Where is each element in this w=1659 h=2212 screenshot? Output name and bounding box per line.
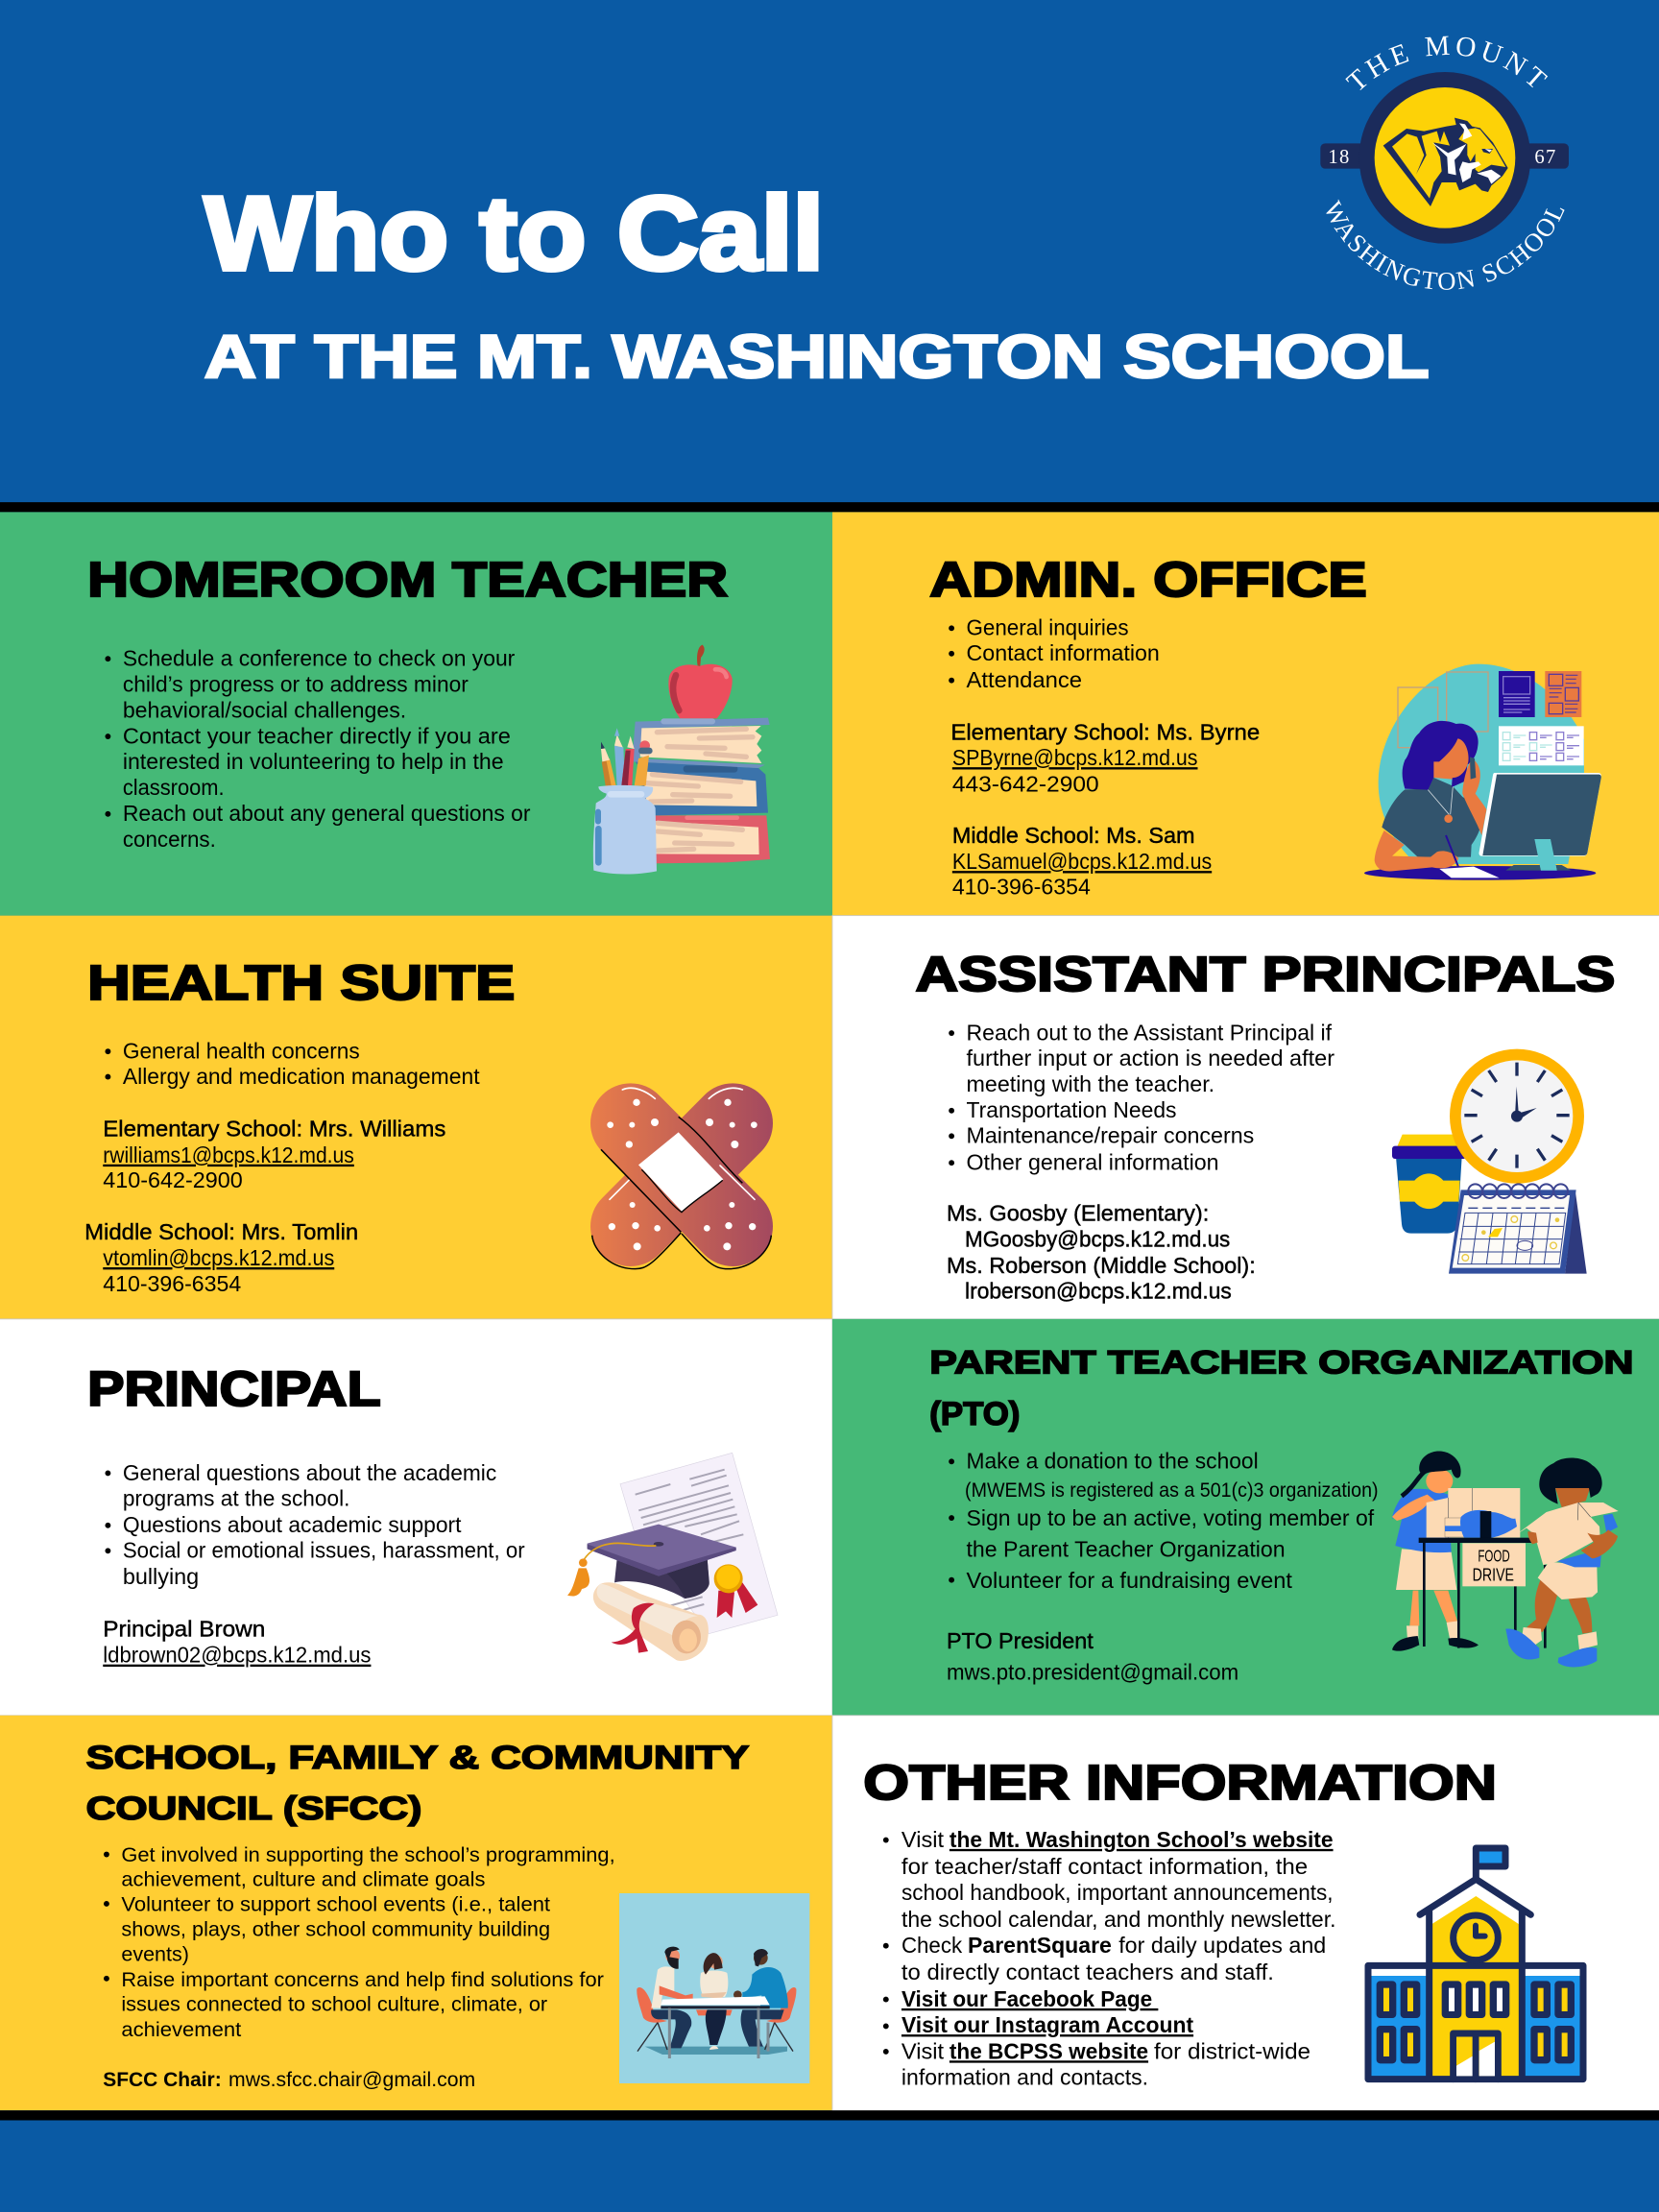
contact: pto: mws.pto.president@gmail.com bbox=[947, 1659, 1238, 1684]
header band bbox=[202, 36, 1569, 391]
list: homeroom: child’s progress or to address minor bbox=[123, 671, 469, 696]
contacts: admin: SPByrne@bcps.k12.md.us bbox=[952, 745, 1198, 770]
list: pto: Sign up to be an active, voting member of bbox=[967, 1505, 1375, 1530]
list: admin: General inquiries bbox=[967, 615, 1129, 640]
logo: The Mount Washington School: 67 bbox=[1534, 147, 1557, 168]
icon: school building bbox=[1368, 1848, 1583, 2080]
contacts: admin: 443-642-2900 bbox=[952, 771, 1099, 796]
list: other information: the school calendar, and monthly newsletter. bbox=[902, 1907, 1336, 1932]
list: admin bbox=[949, 615, 1160, 692]
heading: parent teacher organization bbox=[929, 1344, 1634, 1432]
list: principal: programs at the school. bbox=[123, 1485, 349, 1510]
list: pto: (MWEMS is registered as a 501(c)3 organization) bbox=[965, 1479, 1379, 1502]
list: assistant principals: Reach out to the Assistant Principal if bbox=[967, 1020, 1333, 1045]
logo: The Mount Washington School bbox=[1320, 36, 1569, 290]
heading: homeroom teacher: HOMEROOM TEACHER bbox=[87, 551, 728, 607]
heading: principal: PRINCIPAL bbox=[87, 1360, 381, 1416]
list: assistant principals bbox=[949, 1020, 1334, 1175]
logo: The Mount Washington School: THE MOUNT bbox=[1345, 36, 1548, 90]
panel: parent teacher organization bbox=[832, 1319, 1659, 1716]
list: sfcc: Get involved in supporting the school’s programming, bbox=[121, 1843, 615, 1866]
logo: The Mount Washington School: WASHINGTON SCHOOL bbox=[1326, 200, 1565, 290]
list: other information: to directly contact teachers and staff. bbox=[902, 1960, 1274, 1984]
contacts: assistant principals: lroberson@bcps.k12.md.us bbox=[965, 1278, 1232, 1303]
list: other information: Visit bbox=[902, 1827, 944, 1852]
list: assistant principals: meeting with the teacher. bbox=[967, 1071, 1214, 1096]
panel: principal bbox=[0, 1319, 832, 1716]
list: admin: Contact information bbox=[967, 640, 1160, 665]
icon: woman on phone at computer bbox=[1364, 664, 1601, 880]
list: sfcc: events) bbox=[121, 1942, 189, 1965]
contacts: assistant principals: MGoosby@bcps.k12.md.us bbox=[965, 1227, 1230, 1252]
contact: sfcc: SFCC Chair: bbox=[103, 2068, 222, 2091]
subtitle: AT THE MT. WASHINGTON SCHOOL bbox=[204, 324, 1429, 391]
list: other information: Check bbox=[902, 1933, 962, 1958]
icon: food drive kids bbox=[1392, 1451, 1619, 1667]
contacts: assistant principals: Ms. Roberson (Middle School): bbox=[947, 1253, 1256, 1278]
list: other information: Visit our Instagram Account bbox=[902, 2012, 1193, 2037]
contacts: admin: 410-396-6354 bbox=[952, 875, 1091, 900]
list: principal: General questions about the academic bbox=[123, 1460, 496, 1485]
list: sfcc: shows, plays, other school community building bbox=[121, 1918, 550, 1941]
contact: sfcc bbox=[103, 2068, 475, 2091]
icon: graduation cap, diploma and ribbon bbox=[567, 1453, 778, 1661]
contacts: health: vtomlin@bcps.k12.md.us bbox=[103, 1245, 334, 1270]
contact: principal: Principal Brown bbox=[103, 1616, 265, 1641]
list: principal: bullying bbox=[123, 1564, 199, 1589]
list: other information: the BCPSS website bbox=[950, 2038, 1148, 2063]
list: homeroom: behavioral/social challenges. bbox=[123, 697, 406, 722]
list: other information bbox=[883, 1827, 1336, 2089]
list: other information: school handbook, important announcements, bbox=[902, 1880, 1334, 1905]
list: other information: the Mt. Washington School’s website bbox=[950, 1827, 1334, 1852]
icon: books, apple and pencils bbox=[593, 645, 770, 875]
contacts: admin: Middle School: Ms. Sam bbox=[952, 823, 1195, 848]
contact: sfcc: mws.sfcc.chair@gmail.com bbox=[228, 2068, 475, 2091]
list: other information: for district-wide bbox=[1154, 2038, 1310, 2063]
contacts: health: 410-642-2900 bbox=[103, 1167, 243, 1192]
contact: pto bbox=[947, 1628, 1238, 1684]
list: homeroom: concerns. bbox=[123, 827, 216, 852]
panel: other information bbox=[832, 1716, 1659, 2110]
icon: people meeting at table bbox=[619, 1893, 809, 2083]
logo: The Mount Washington School: 18 bbox=[1328, 147, 1351, 168]
list: sfcc: Raise important concerns and help find solutions for bbox=[121, 1968, 604, 1991]
contact: principal bbox=[103, 1616, 371, 1668]
contacts: health: rwilliams1@bcps.k12.md.us bbox=[103, 1142, 354, 1167]
heading: assistant principals: ASSISTANT PRINCIPALS bbox=[916, 946, 1615, 1001]
contact: principal: ldbrown02@bcps.k12.md.us bbox=[103, 1643, 371, 1668]
list: pto: the Parent Teacher Organization bbox=[967, 1536, 1286, 1561]
panel: school, family & community council bbox=[0, 1716, 832, 2110]
list: admin: Attendance bbox=[967, 667, 1082, 692]
list: pto: Volunteer for a fundraising event bbox=[967, 1568, 1292, 1593]
footer band bbox=[0, 2110, 1659, 2212]
panel: admin office bbox=[832, 512, 1659, 916]
list: sfcc: issues connected to school culture, climate, or bbox=[121, 1993, 547, 2016]
list: assistant principals: Other general information bbox=[967, 1150, 1219, 1175]
list: health: General health concerns bbox=[123, 1038, 360, 1063]
list: pto bbox=[949, 1449, 1379, 1593]
heading: admin office: ADMIN. OFFICE bbox=[929, 551, 1367, 607]
list: principal: Questions about academic support bbox=[123, 1512, 462, 1537]
list: health: Allergy and medication management bbox=[123, 1064, 480, 1089]
list: homeroom: Reach out about any general questions or bbox=[123, 801, 531, 826]
list: other information: information and contacts. bbox=[902, 2064, 1148, 2089]
icon: food drive kids: FOOD bbox=[1478, 1547, 1510, 1566]
icon: food drive kids: DRIVE bbox=[1473, 1565, 1514, 1585]
contacts: admin bbox=[950, 720, 1260, 900]
list: assistant principals: further input or action is needed after bbox=[967, 1046, 1334, 1070]
contacts: admin: KLSamuel@bcps.k12.md.us bbox=[952, 849, 1212, 874]
list: principal: Social or emotional issues, harassment, or bbox=[123, 1538, 525, 1563]
contacts: admin: Elementary School: Ms. Byrne bbox=[950, 720, 1260, 745]
panel: health suite bbox=[0, 916, 832, 1319]
contacts: health: 410-396-6354 bbox=[103, 1271, 241, 1296]
list: health bbox=[105, 1038, 480, 1089]
list: principal bbox=[105, 1460, 525, 1589]
list: homeroom bbox=[105, 646, 531, 852]
heading: other information: OTHER INFORMATION bbox=[863, 1754, 1497, 1810]
list: other information: Visit our Facebook Page bbox=[902, 1986, 1158, 2011]
contacts: health: Elementary School: Mrs. Williams bbox=[103, 1117, 445, 1142]
top black rule bbox=[0, 502, 1659, 512]
list: pto: Make a donation to the school bbox=[967, 1449, 1259, 1474]
contacts: health bbox=[84, 1117, 445, 1296]
icon: clock, cup and calendar bbox=[1392, 1049, 1587, 1274]
list: other information: Visit bbox=[902, 2038, 944, 2063]
list: assistant principals: Maintenance/repair concerns bbox=[967, 1123, 1254, 1148]
list: sfcc: achievement bbox=[121, 2018, 241, 2041]
heading: sfcc: COUNCIL (SFCC) bbox=[86, 1791, 421, 1827]
list: homeroom: interested in volunteering to help in the bbox=[123, 749, 504, 774]
list: other information: for daily updates and bbox=[1118, 1933, 1326, 1958]
list: homeroom: Schedule a conference to check on your bbox=[123, 646, 515, 671]
list: other information: ParentSquare bbox=[968, 1933, 1112, 1958]
title: Who to Call bbox=[204, 177, 824, 293]
icon: crossed bandages bbox=[592, 1088, 771, 1269]
heading: sfcc bbox=[86, 1740, 749, 1827]
heading: parent teacher organization: (PTO) bbox=[929, 1396, 1020, 1432]
contact: pto: PTO President bbox=[947, 1628, 1094, 1653]
list: assistant principals: Transportation Needs bbox=[967, 1097, 1176, 1122]
contacts: health: Middle School: Mrs. Tomlin bbox=[84, 1219, 358, 1244]
list: homeroom: classroom. bbox=[123, 775, 225, 800]
list: sfcc: achievement, culture and climate goals bbox=[121, 1868, 485, 1891]
heading: sfcc: SCHOOL, FAMILY & COMMUNITY bbox=[86, 1740, 749, 1776]
contacts: assistant principals: Ms. Goosby (Elementary): bbox=[947, 1200, 1209, 1225]
list: sfcc: Volunteer to support school events (i.e., talent bbox=[121, 1892, 550, 1915]
panel: homeroom teacher bbox=[0, 512, 832, 916]
heading: parent teacher organization: PARENT TEACHER ORGANIZATION bbox=[929, 1344, 1634, 1381]
list: sfcc bbox=[104, 1843, 615, 2041]
panel: assistant principals bbox=[832, 916, 1659, 1319]
list: other information: for teacher/staff contact information, the bbox=[902, 1854, 1308, 1879]
list: homeroom: Contact your teacher directly if you are bbox=[123, 723, 511, 748]
contacts: assistant principals bbox=[947, 1200, 1256, 1303]
heading: health suite: HEALTH SUITE bbox=[87, 954, 515, 1010]
